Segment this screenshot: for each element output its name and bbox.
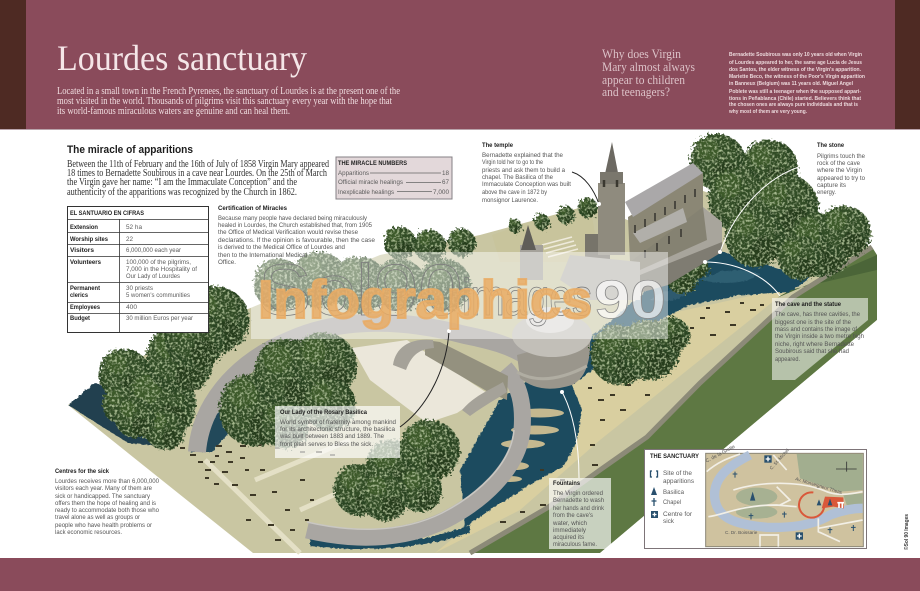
callout: fountains: water, which — [552, 520, 587, 527]
table: el santuario en cifras: Permanent — [70, 285, 101, 292]
watermark text — [258, 251, 666, 331]
box: the miracle numbers: 7,000 — [433, 189, 449, 196]
callout: the stone: capture its — [817, 182, 847, 189]
callout: our lady of the rosary basilica: for its architectonic structure, the basilica — [280, 426, 395, 433]
locator panel: the sanctuary: THE SANCTUARY — [650, 453, 700, 460]
intro text: Located in a small town in the French Pyrenees, the sanctuary of Lourdes is at the present one of the — [57, 86, 400, 97]
callout: the temple: monsignor Laurence. — [482, 197, 538, 204]
trees: background row — [254, 198, 598, 313]
watermark text: Infographics — [258, 270, 592, 330]
callout: the cave and the statue: The cave and the statue — [775, 301, 841, 308]
big ramp, north arm — [197, 323, 530, 452]
table: el santuario en cifras: Visitors — [70, 247, 94, 254]
connector: Rosary Basilica — [400, 329, 451, 427]
Rosary basilica wall — [393, 340, 508, 416]
legend: Basilica — [663, 489, 684, 496]
small shrubs by the river — [666, 257, 709, 294]
table: el santuario en cifras: Our Lady of Lourdes — [126, 273, 180, 280]
table: el santuario en cifras: 100,000 of the pilgrims, — [126, 259, 191, 266]
legend: Chapel — [663, 499, 681, 506]
callout: the temple: The temple — [482, 142, 513, 149]
callout: fountains — [552, 480, 605, 548]
pilgrims — [180, 303, 764, 540]
question answer text: Poblete was still a teenager when the supposed appari- — [729, 89, 861, 95]
table: el santuario en cifras: Extension — [70, 224, 98, 231]
callout: fountains: acquired its — [553, 534, 585, 541]
table: el santuario en cifras: clerics — [70, 292, 88, 299]
river — [68, 245, 810, 549]
question answer text: in Banneux (Belgium) was 11 years old. Miguel Angel — [729, 81, 853, 87]
callout: the cave and the statue: appeared. — [775, 356, 800, 363]
connector: fountains — [560, 390, 579, 478]
text block: certification of miracles: healed in Lourdes, the Church established that, from 1905 — [218, 222, 372, 229]
paragraph: apparitions: 18 times to Bernadette Soubirous in a cave near Lourdes. On the 25th of March — [67, 168, 327, 179]
connector: the stone — [718, 163, 815, 254]
text block: certification of miracles: Because many people have declared being miraculously — [218, 215, 368, 222]
footer band — [0, 558, 920, 591]
connector: cave and statue — [703, 260, 780, 296]
ground — [68, 190, 877, 553]
watermark text: Sol90 — [258, 251, 463, 331]
table: el santuario en cifras: 22 — [126, 236, 133, 243]
question answer text: of Lourdes appeared to her, the same age Lucia de Jesus — [729, 60, 862, 66]
table: el santuario en cifras: Employees — [70, 304, 100, 311]
callout: the temple: above the cave in 1872 by — [482, 189, 548, 196]
text block: certification of miracles: Certification of Miracles — [218, 205, 287, 212]
watermark text: 90 — [594, 270, 666, 330]
promenade — [435, 285, 800, 553]
box: the miracle numbers: Apparitions — [338, 170, 369, 177]
lightened cave panel — [772, 298, 868, 380]
paragraph: apparitions: the Virgin gave her name: “I am the Immaculate Conception” and the — [67, 177, 297, 188]
callout: centres for the sick: visitors each year. Many of them are — [55, 485, 152, 492]
callout: the cave and the statue — [775, 301, 864, 363]
callout: the cave and the statue: biggest one is the site of the — [775, 319, 851, 326]
trees: large group behind the basilica — [690, 134, 871, 280]
callout: centres for the sick: sick or handicapped. The sanctuary — [55, 493, 151, 500]
legend — [650, 470, 694, 525]
box: the miracle numbers: Inexplicable healings — [338, 189, 394, 196]
map — [705, 444, 863, 547]
legend: apparitions — [663, 478, 694, 485]
watermark text: images — [462, 269, 592, 327]
pale pavement strips — [205, 440, 400, 553]
question heading: appear to children — [602, 72, 685, 87]
table: el santuario en cifras: EL SANTUARIO EN CIFRAS — [70, 210, 145, 217]
callout: our lady of the rosary basilica: front plain serves to Bless the sick. — [280, 441, 373, 448]
table: el santuario en cifras: 5 women's communities — [126, 292, 190, 299]
small chapel spire — [520, 225, 543, 280]
callout: centres for the sick: Lourdes receives more than 6,000,000 — [55, 478, 159, 485]
lawn — [470, 247, 877, 553]
callout: the stone: Pilgrims touch the — [817, 153, 865, 160]
text block: certification of miracles: Office. — [218, 259, 236, 266]
text block: certification of miracles: then to the International Medical — [218, 252, 308, 259]
paragraph: apparitions — [67, 159, 329, 198]
title: Lourdes sanctuary — [57, 38, 307, 78]
callout: the cave and the statue: niche, right where Bernadette — [775, 341, 854, 348]
callout: our lady of the rosary basilica: World symbol of fraternity among mankind — [280, 419, 396, 426]
callout: the cave and the statue: The cave, has three cavities, the — [775, 311, 860, 318]
callout: centres for the sick: travel alone as well as groups or — [55, 514, 141, 521]
callout: the temple: Bernadette explained that the — [482, 152, 563, 159]
sanctuary illustration — [68, 134, 920, 553]
table: el santuario en cifras — [67, 206, 208, 332]
trees: inner group — [219, 333, 357, 449]
question answer text: dos Santos, the elder witness of the Virgin's apparition. — [729, 67, 861, 73]
table: el santuario en cifras: Worship sites — [70, 236, 108, 243]
map: Av. Monseigneur Theas — [795, 476, 843, 495]
header band — [0, 0, 920, 130]
intro text — [57, 86, 400, 117]
legend: sick — [663, 518, 675, 525]
trees: east of rotunda — [590, 317, 690, 385]
legend: Centre for — [663, 511, 693, 518]
table: el santuario en cifras: 30 million Euros per year — [126, 315, 194, 322]
callout: the stone: energy. — [817, 189, 836, 196]
table: el santuario en cifras: Budget — [70, 315, 91, 322]
callout: fountains: The Virgin ordered — [553, 490, 603, 497]
callout: fountains: from the cave's — [553, 512, 594, 519]
big ramp, south arm — [307, 368, 522, 537]
text block: certification of miracles — [218, 205, 375, 266]
Fountains panel backdrop — [549, 478, 611, 549]
basilica with spire — [585, 142, 722, 295]
callout: the temple: Virgin told her to go to the — [482, 159, 543, 166]
text block: certification of miracles: is derived to the Medical Office of Lourdes and — [218, 244, 345, 251]
callout: fountains: her hands and drink — [553, 505, 605, 512]
callout: the temple: priests and ask them to build a — [482, 167, 565, 174]
box: the miracle numbers: 67 — [442, 179, 449, 186]
callout: centres for the sick: people who have health problems or — [55, 522, 153, 529]
trees: left groups — [99, 286, 249, 450]
callout: the stone — [816, 142, 865, 196]
trees: foreground group — [334, 420, 460, 521]
table: el santuario en cifras: 52 ha — [126, 224, 142, 231]
rotunda — [512, 307, 592, 389]
callout: our lady of the rosary basilica — [279, 409, 396, 448]
watermark panel — [251, 252, 668, 339]
text block: certification of miracles: the Office of Medical Verification would revise these — [218, 229, 358, 236]
callout: fountains: Bernadette to wash — [553, 497, 604, 504]
callout: the cave and the statue: Soubirous said that she had — [775, 348, 849, 355]
map: C. St. Michel — [769, 448, 790, 471]
heading: the miracle of apparitions: The miracle of apparitions — [67, 144, 193, 156]
text block: certification of miracles: declarations. If the opinion is favourable, then the case — [218, 237, 375, 244]
callout: the stone: where the Virgin — [816, 167, 862, 174]
callout: our lady of the rosary basilica: was built between 1883 and 1889. The — [279, 433, 384, 440]
question answer text: Mariette Beco, the witness of the Poor's Virgin apparition — [729, 74, 866, 80]
intro text: most visited in the world. Thousands of pilgrims visit this sanctuary every year with the hope that — [57, 96, 392, 107]
question heading — [602, 46, 695, 99]
embankment wall — [470, 247, 872, 553]
box: the miracle numbers — [336, 157, 452, 199]
map: C. Dr. Boissarie — [725, 530, 758, 535]
callout: centres for the sick — [55, 468, 159, 536]
map: C. de la Grotte — [705, 444, 736, 464]
box: the miracle numbers: 18 — [442, 170, 449, 177]
callout: the cave and the statue: the Virgin inside a two metre high — [775, 333, 864, 340]
question answer text: tions in Peñablanca (Chile) started. Believers think that — [729, 96, 861, 102]
question heading: Why does Virgin — [602, 46, 681, 61]
callout: the temple — [482, 142, 571, 204]
table: el santuario en cifras: 400 — [126, 304, 137, 311]
table: el santuario en cifras: 6,000,000 each year — [126, 247, 182, 254]
callout: centres for the sick: Centres for the sick — [55, 468, 109, 475]
paragraph: apparitions: authenticity of the apparitions was recognized by the Church in 1862. — [67, 187, 297, 198]
table: el santuario en cifras: Volunteers — [70, 259, 101, 266]
callout: the stone: rock of the cave — [817, 160, 860, 167]
callout: the temple: Immaculate Conception was built — [482, 181, 571, 188]
plaza in front of the basilica — [560, 255, 640, 300]
locator panel: the sanctuary — [644, 444, 866, 548]
white corner cuts on the illustration outline — [600, 320, 920, 553]
question answer text: why most of them are very young. — [728, 109, 807, 115]
river islets — [498, 408, 564, 482]
callout: our lady of the rosary basilica: Our Lady of the Rosary Basilica — [280, 409, 367, 416]
callout: the temple: chapel. The Basilica of the — [482, 174, 553, 181]
callout: fountains: miraculous fame. — [553, 541, 597, 548]
box: the miracle numbers: Official miracle healings — [338, 179, 403, 186]
question answer text: the chosen ones are always pure individuals and that is — [729, 102, 858, 108]
intro text: its world-famous miraculous waters are genuine and can heal them. — [57, 106, 290, 117]
connector: the temple — [572, 172, 601, 206]
question answer text: Bernadette Soubirous was only 10 years old when Virgin — [729, 52, 863, 58]
callout: fountains: immediately — [553, 527, 587, 534]
callout: fountains: Fountains — [553, 480, 580, 487]
callout: the stone: appeared to try to — [817, 175, 865, 182]
callout: the stone: The stone — [817, 142, 844, 149]
callout: centres for the sick: ready to accommodate both those who — [55, 507, 159, 514]
legend: Site of the — [663, 470, 692, 477]
paragraph: apparitions: Between the 11th of February and the 16th of July of 1858 Virgin Mary appeared — [67, 159, 329, 170]
question heading: Mary almost always — [602, 59, 695, 74]
callout: centres for the sick: lack economic resources. — [55, 529, 122, 536]
credit: ©Sol 90 Images — [903, 514, 910, 550]
question answer text — [728, 52, 866, 115]
box: the miracle numbers: THE MIRACLE NUMBERS — [338, 160, 408, 167]
callout: the cave and the statue: mass and contains the image of — [775, 326, 857, 333]
question heading: and teenagers? — [602, 84, 670, 99]
callout: centres for the sick: offers them the hope of healing and is — [55, 500, 157, 507]
esplanade — [352, 340, 487, 423]
table: el santuario en cifras: 30 priests — [126, 285, 153, 292]
hillside behind the basilica — [492, 205, 600, 262]
Our Lady panel backdrop — [275, 406, 400, 458]
table: el santuario en cifras: 7,000 in the Hospitality of — [126, 266, 197, 273]
